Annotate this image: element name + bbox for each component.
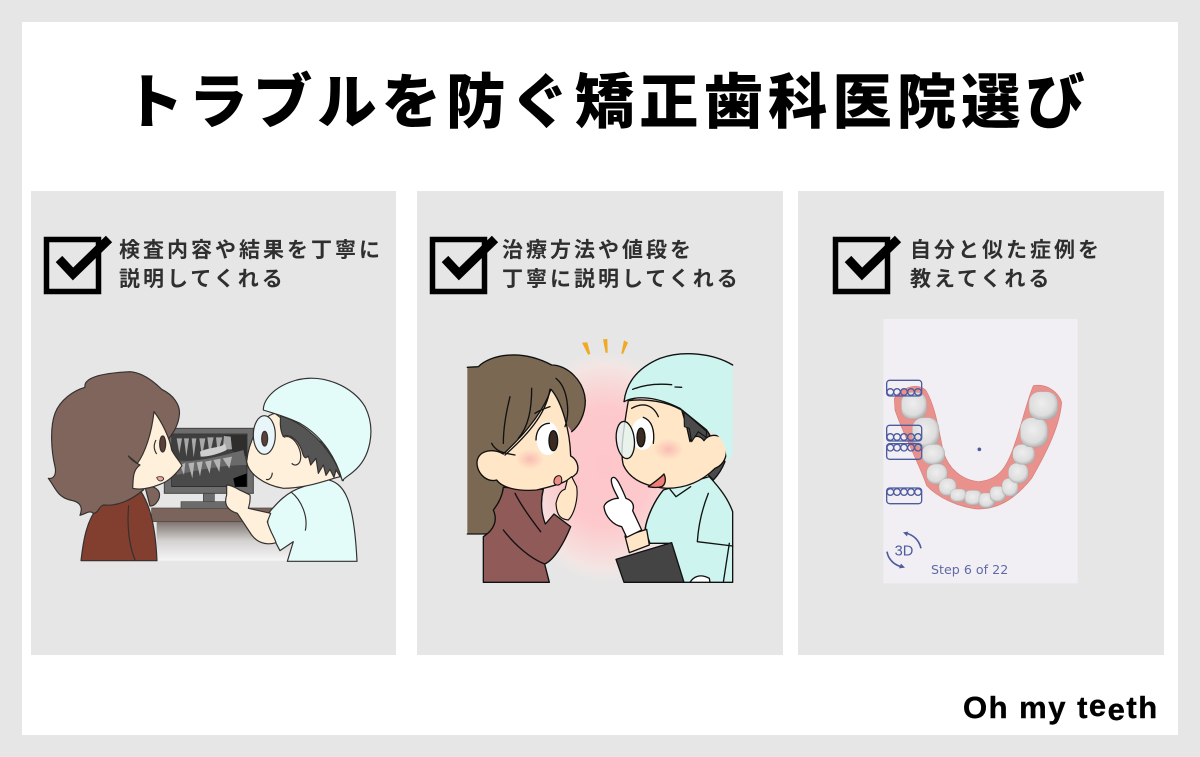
illustration: dentist and patient talk [466,339,734,583]
woman patient [467,355,585,582]
icon: 3D rotate: 3D [895,544,913,560]
icon: checkbox [44,236,112,294]
pink background [512,348,698,585]
text: exam explanation [119,238,383,291]
panel: shows similar cases [798,191,1164,655]
surprise marks [582,339,628,355]
dentist [226,378,371,561]
dentist [604,354,733,582]
logo: Oh my teeth [963,688,1159,727]
text: treatment explanation [502,238,741,291]
title: トラブルを防ぐ矯正歯科医院選び [124,69,1090,136]
panel: explains treatment and cost [417,191,783,655]
text: treatment explanation: 治療方法や値段を [502,239,694,262]
text: similar cases: 教えてくれる [910,268,1052,291]
step label: Step 6 of 22 [931,562,1008,577]
gum arch [894,385,1062,509]
monitor with x-ray [164,428,253,508]
text: similar cases [910,238,1102,291]
icon: 3D rotate [887,532,921,568]
illustration: dentist shows x-ray to patient [48,371,372,562]
icon: checkbox [430,236,498,294]
teeth [901,392,1058,508]
center dot [978,448,981,451]
text: exam explanation: 検査内容や結果を丁寧に [119,239,383,262]
text: similar cases: 自分と似た症例を [910,239,1102,262]
simulation background [883,319,1078,583]
desk [152,508,290,561]
text: exam explanation: 説明してくれる [119,268,286,291]
panel: explains exam results [31,191,396,655]
icon: checkbox [832,236,902,294]
tray icons [887,380,922,504]
text: treatment explanation: 丁寧に説明してくれる [502,268,741,291]
illustration: 3D aligner simulation [884,319,1078,584]
woman patient [48,372,182,561]
